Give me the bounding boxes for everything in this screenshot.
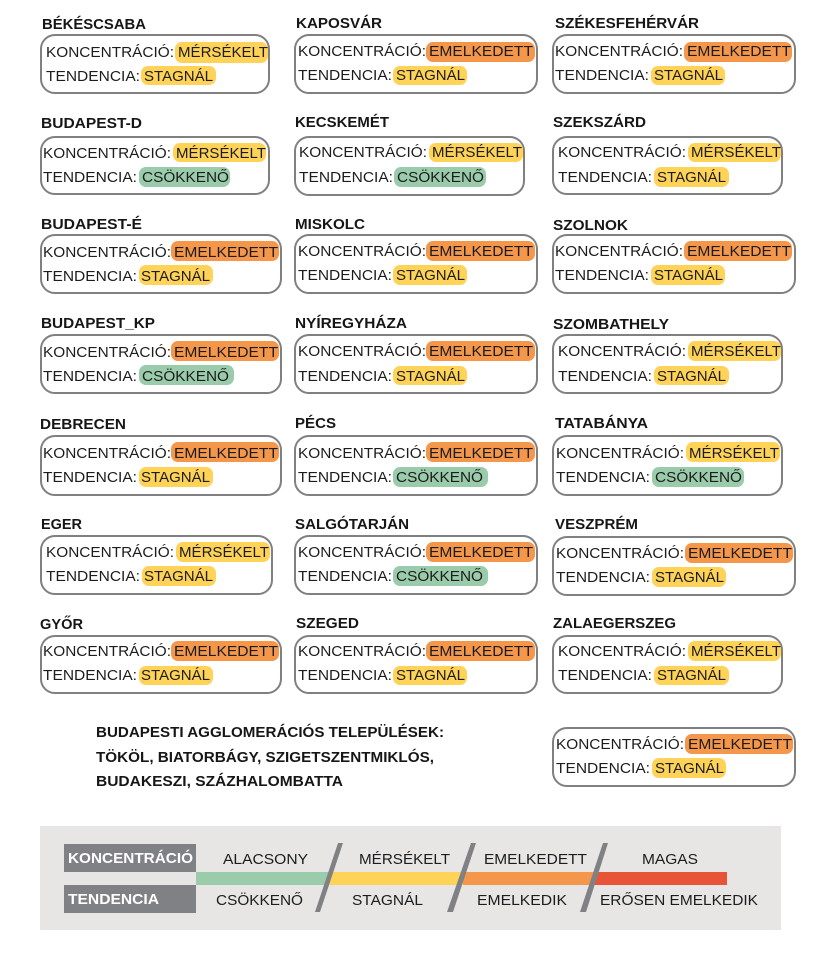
card: Szeged	[295, 616, 537, 693]
card: Budapest_KP: CSÖKKENŐ	[142, 367, 229, 385]
card: agglomeration: TENDENCIA:	[556, 760, 650, 777]
card: Szombathely: MÉRSÉKELT	[691, 343, 781, 360]
card: Szeged: TENDENCIA:	[298, 667, 392, 684]
card: Debrecen: STAGNÁL	[141, 469, 210, 486]
card: Szombathely	[553, 317, 782, 393]
card: Békéscsaba: KONCENTRÁCIÓ:	[46, 44, 174, 61]
card: Veszprém: STAGNÁL	[655, 569, 724, 586]
card: Székesfehérvár: KONCENTRÁCIÓ:	[555, 43, 683, 60]
card: Budapest-D: KONCENTRÁCIÓ:	[43, 145, 171, 162]
card: Kaposvár: KONCENTRÁCIÓ:	[298, 43, 426, 60]
card: Nyíregyháza: NYÍREGYHÁZA	[295, 315, 408, 332]
card: agglomeration: KONCENTRÁCIÓ:	[556, 736, 684, 753]
card: Kecskemét: CSÖKKENŐ	[397, 168, 484, 186]
card: Székesfehérvár: SZÉKESFEHÉRVÁR	[555, 15, 700, 32]
legend trend labels: CSÖKKENŐ	[216, 891, 303, 909]
card: Pécs: KONCENTRÁCIÓ:	[298, 445, 426, 462]
card: Békéscsaba: STAGNÁL	[144, 68, 213, 85]
legend level labels: ALACSONY	[223, 851, 308, 868]
card: Budapest-D: BUDAPEST-D	[41, 116, 142, 132]
card: Szekszárd: STAGNÁL	[657, 169, 726, 186]
legend label: concentration: KONCENTRÁCIÓ	[68, 849, 193, 867]
card: Debrecen	[40, 417, 281, 495]
card: Kecskemét: MÉRSÉKELT	[432, 144, 522, 161]
card: Zalaegerszeg: MÉRSÉKELT	[691, 643, 781, 660]
card: Kecskemét	[295, 114, 524, 195]
card: Eger: TENDENCIA:	[46, 568, 140, 585]
card: Győr: GYŐR	[40, 615, 84, 633]
legend trend labels: STAGNÁL	[352, 892, 423, 909]
card: agglomeration	[553, 728, 795, 786]
card: Szombathely: STAGNÁL	[657, 368, 726, 385]
card: Tatabánya: CSÖKKENŐ	[655, 468, 742, 486]
card: Szeged: SZEGED	[296, 616, 359, 632]
card: Miskolc	[295, 217, 537, 293]
card: Székesfehérvár: TENDENCIA:	[555, 67, 649, 84]
card: Szombathely: KONCENTRÁCIÓ:	[558, 343, 686, 360]
card: Budapest_KP: TENDENCIA:	[43, 368, 137, 385]
card: Budapest-É	[41, 216, 281, 293]
legend level labels: MAGAS	[642, 851, 698, 868]
card: Budapest_KP: BUDAPEST_KP	[41, 316, 155, 332]
legend trend labels	[216, 891, 758, 909]
card: Salgótarján	[295, 515, 537, 594]
card: Budapest_KP: EMELKEDETT	[174, 344, 278, 361]
legend level labels: EMELKEDETT	[484, 851, 587, 868]
card: Salgótarján: SALGÓTARJÁN	[295, 515, 409, 533]
card: Szekszárd: MÉRSÉKELT	[691, 144, 781, 161]
card: Budapest-É: BUDAPEST-É	[41, 216, 142, 233]
legend panel	[40, 826, 781, 930]
card: Szeged: STAGNÁL	[396, 667, 465, 684]
card: Nyíregyháza: STAGNÁL	[396, 368, 465, 385]
card: Győr	[40, 615, 281, 693]
card: Szeged: EMELKEDETT	[429, 643, 533, 660]
text block: agglomeration settlements: TÖKÖL, BIATORBÁGY, SZIGETSZENTMIKLÓS,	[96, 748, 434, 766]
text block: agglomeration settlements	[96, 723, 444, 790]
card: Szeged: KONCENTRÁCIÓ:	[298, 643, 426, 660]
card: Győr: STAGNÁL	[141, 667, 210, 684]
card: agglomeration: EMELKEDETT	[688, 736, 792, 753]
legend colour scale bar	[196, 872, 727, 885]
card: Debrecen: TENDENCIA:	[43, 469, 137, 486]
card: Pécs: PÉCS	[295, 415, 336, 432]
card: Kaposvár	[295, 15, 537, 93]
card: Budapest-É: STAGNÁL	[141, 268, 210, 285]
card: Szekszárd: SZEKSZÁRD	[553, 114, 646, 131]
card: Eger	[41, 517, 272, 594]
legend trend labels: ERŐSEN EMELKEDIK	[600, 892, 758, 909]
card: Tatabánya: KONCENTRÁCIÓ:	[556, 445, 684, 462]
legend label: tendency	[64, 885, 196, 913]
card: Debrecen: KONCENTRÁCIÓ:	[43, 445, 171, 462]
card: Nyíregyháza: TENDENCIA:	[298, 368, 392, 385]
card: Budapest-É: KONCENTRÁCIÓ:	[43, 244, 171, 261]
card: Békéscsaba: TENDENCIA:	[46, 68, 140, 85]
card: Békéscsaba	[41, 16, 269, 93]
legend dividers	[315, 843, 608, 912]
card: Nyíregyháza	[295, 315, 537, 393]
card: Budapest_KP: KONCENTRÁCIÓ:	[43, 344, 171, 361]
card: Szolnok: KONCENTRÁCIÓ:	[555, 243, 683, 260]
card: Nyíregyháza: EMELKEDETT	[429, 343, 533, 360]
card: Kaposvár: TENDENCIA:	[298, 67, 392, 84]
card: Szekszárd	[553, 114, 782, 194]
card: Salgótarján: KONCENTRÁCIÓ:	[298, 544, 426, 561]
card: Eger: KONCENTRÁCIÓ:	[46, 544, 174, 561]
card: Budapest-D: TENDENCIA:	[43, 169, 137, 186]
card: Salgótarján: TENDENCIA:	[298, 568, 392, 585]
card: Miskolc: STAGNÁL	[396, 267, 465, 284]
card: Budapest-D: MÉRSÉKELT	[176, 145, 266, 162]
card: Pécs: TENDENCIA:	[298, 469, 392, 486]
card: Kecskemét: KONCENTRÁCIÓ:	[299, 144, 427, 161]
card: Miskolc: MISKOLC	[295, 217, 366, 233]
card: Szolnok: EMELKEDETT	[687, 243, 791, 260]
card: Győr: TENDENCIA:	[43, 667, 137, 684]
card: Székesfehérvár: EMELKEDETT	[687, 43, 791, 60]
card: Szolnok: SZOLNOK	[553, 218, 629, 234]
text block: agglomeration settlements: BUDAPESTI AGGLOMERÁCIÓS TELEPÜLÉSEK:	[96, 723, 444, 741]
card: Kecskemét: KECSKEMÉT	[295, 114, 389, 131]
card: Győr: KONCENTRÁCIÓ:	[43, 643, 171, 660]
card: Békéscsaba: BÉKÉSCSABA	[42, 16, 147, 33]
card: Pécs	[295, 415, 537, 495]
card: Miskolc: EMELKEDETT	[429, 243, 533, 260]
card: Salgótarján: EMELKEDETT	[429, 544, 533, 561]
card: Székesfehérvár	[553, 15, 795, 93]
card: Veszprém: EMELKEDETT	[688, 545, 792, 562]
card: Miskolc: KONCENTRÁCIÓ:	[298, 243, 426, 260]
card: Budapest-É: TENDENCIA:	[43, 268, 137, 285]
legend trend labels: EMELKEDIK	[477, 892, 567, 909]
card: agglomeration: STAGNÁL	[655, 760, 724, 777]
card: Zalaegerszeg: STAGNÁL	[657, 667, 726, 684]
card: Salgótarján: CSÖKKENŐ	[396, 567, 483, 585]
card: Szolnok	[553, 218, 795, 293]
card: Veszprém: VESZPRÉM	[555, 516, 638, 533]
card: Kecskemét: TENDENCIA:	[299, 169, 393, 186]
card: Szombathely: SZOMBATHELY	[553, 317, 669, 333]
card: Veszprém: TENDENCIA:	[556, 569, 650, 586]
card: Tatabánya	[553, 415, 782, 495]
legend label: concentration	[64, 844, 196, 872]
card: Pécs: CSÖKKENŐ	[396, 468, 483, 486]
card: Nyíregyháza: KONCENTRÁCIÓ:	[298, 343, 426, 360]
card: Veszprém	[553, 516, 795, 595]
card: Zalaegerszeg: KONCENTRÁCIÓ:	[558, 643, 686, 660]
card: Szekszárd: KONCENTRÁCIÓ:	[558, 144, 686, 161]
card: Békéscsaba: MÉRSÉKELT	[178, 44, 268, 61]
card: Szolnok: STAGNÁL	[654, 267, 723, 284]
card: Eger: EGER	[41, 517, 83, 533]
text block: agglomeration settlements: BUDAKESZI, SZÁZHALOMBATTA	[96, 773, 344, 790]
card: Székesfehérvár: STAGNÁL	[654, 67, 723, 84]
card: Budapest-D	[41, 116, 269, 194]
card: Zalaegerszeg: TENDENCIA:	[558, 667, 652, 684]
card: Győr: EMELKEDETT	[174, 643, 278, 660]
card: Miskolc: TENDENCIA:	[298, 267, 392, 284]
card: Tatabánya: TENDENCIA:	[556, 469, 650, 486]
card: Budapest-É: EMELKEDETT	[174, 244, 278, 261]
card: Kaposvár: EMELKEDETT	[429, 43, 533, 60]
card: Zalaegerszeg: ZALAEGERSZEG	[553, 616, 676, 632]
card: Tatabánya: MÉRSÉKELT	[689, 445, 779, 462]
card: Eger: MÉRSÉKELT	[179, 544, 269, 561]
card: Debrecen: EMELKEDETT	[174, 445, 278, 462]
card: Eger: STAGNÁL	[144, 568, 213, 585]
legend level labels: MÉRSÉKELT	[359, 851, 450, 868]
card: Veszprém: KONCENTRÁCIÓ:	[556, 545, 684, 562]
card: Budapest_KP	[41, 316, 281, 393]
legend level labels	[223, 851, 698, 868]
card: Debrecen: DEBRECEN	[40, 417, 126, 433]
card: Szolnok: TENDENCIA:	[555, 267, 649, 284]
card: Pécs: EMELKEDETT	[429, 445, 533, 462]
card: Zalaegerszeg	[553, 616, 782, 693]
card: Tatabánya: TATABÁNYA	[555, 415, 649, 432]
card: Szekszárd: TENDENCIA:	[558, 169, 652, 186]
legend label: tendency: TENDENCIA	[68, 891, 159, 908]
card: Szombathely: TENDENCIA:	[558, 368, 652, 385]
card: Budapest-D: CSÖKKENŐ	[142, 168, 229, 186]
card: Kaposvár: STAGNÁL	[396, 67, 465, 84]
card: Kaposvár: KAPOSVÁR	[296, 15, 383, 32]
